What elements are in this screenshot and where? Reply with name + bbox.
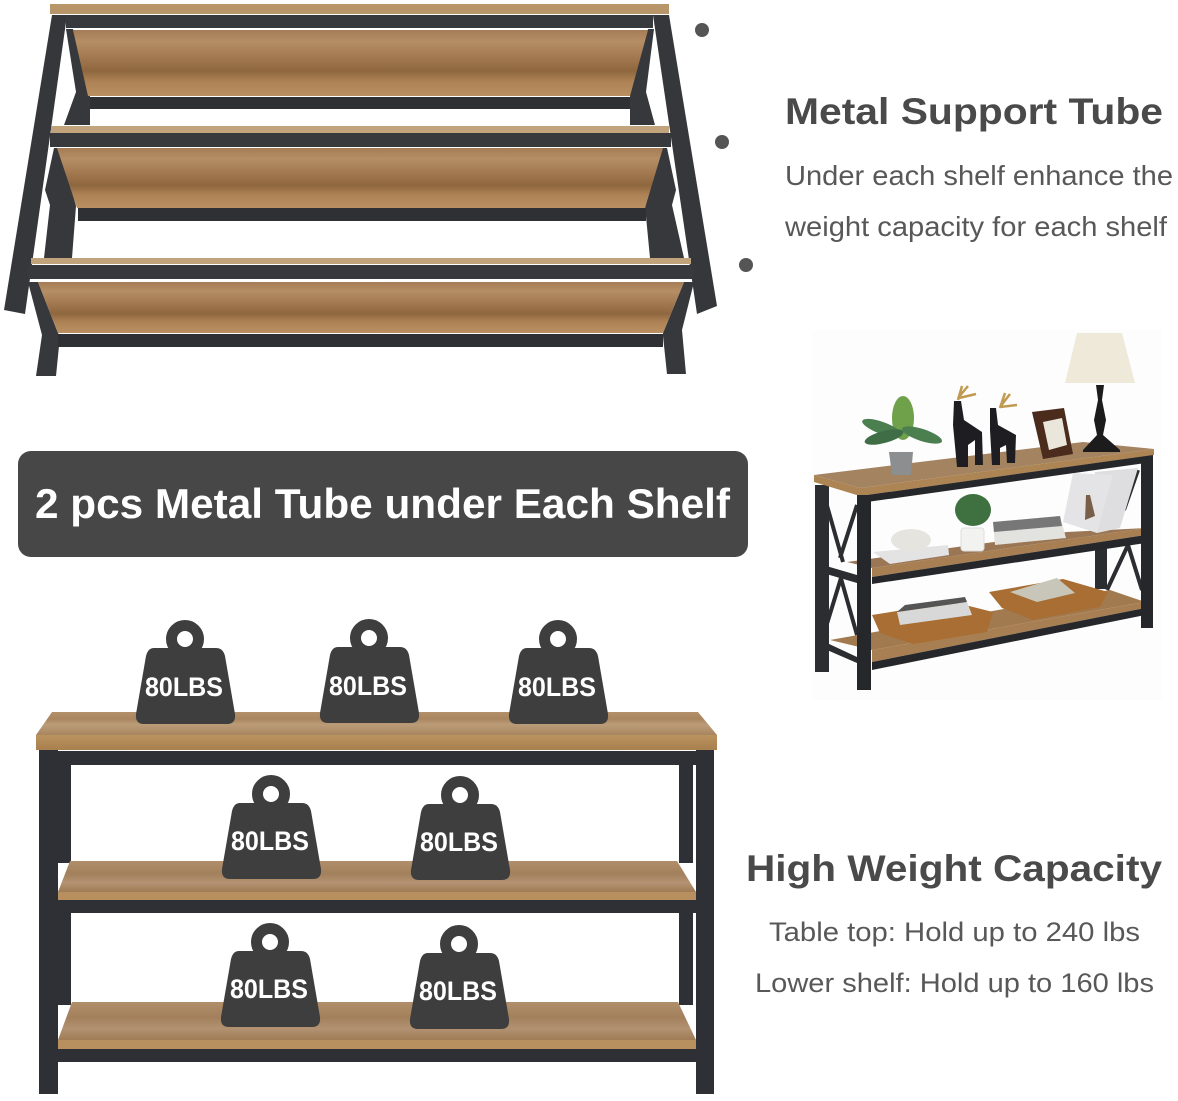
weight: top centre: 80LBS xyxy=(329,671,407,701)
picture frame xyxy=(1032,408,1073,459)
text: metal tube description xyxy=(784,160,1173,242)
middle shelf xyxy=(847,528,1146,584)
weight: middle left: 80LBS xyxy=(231,826,309,856)
legs xyxy=(39,750,714,1094)
bottom board xyxy=(58,1002,696,1062)
weight: bottom left xyxy=(221,928,320,1027)
weight: top right xyxy=(509,626,608,724)
weight: bottom right: 80LBS xyxy=(419,976,497,1006)
text: metal tube description: weight capacity for each shelf xyxy=(784,211,1167,242)
books on middle shelf xyxy=(1063,468,1138,533)
bottom shelf xyxy=(830,590,1145,670)
weight: bottom left: 80LBS xyxy=(230,974,308,1004)
middle board xyxy=(58,861,696,913)
front view table xyxy=(36,712,717,1094)
text: capacity details: Lower shelf: Hold up to 160 lbs xyxy=(755,968,1154,998)
small plant and pot xyxy=(955,494,991,551)
heading: metal support tube: Metal Support Tube xyxy=(785,90,1163,132)
stacked books xyxy=(993,516,1066,545)
top board xyxy=(36,712,717,765)
text: metal tube description: Under each shelf enhance the xyxy=(785,160,1173,191)
top shelf xyxy=(50,4,669,109)
text: capacity details xyxy=(755,917,1154,998)
weight: top centre xyxy=(320,624,419,723)
rear frame struts xyxy=(28,29,694,376)
shelf underside photo xyxy=(4,4,717,376)
weight: top left xyxy=(136,626,235,724)
weight: middle right xyxy=(411,782,510,880)
left outer leg xyxy=(4,15,67,314)
inner posts xyxy=(58,765,693,1005)
lamp xyxy=(1065,333,1135,452)
basket left with books xyxy=(872,597,993,644)
text: capacity details: Table top: Hold up to 240 lbs xyxy=(769,917,1140,947)
weight: middle left xyxy=(222,780,321,879)
banner xyxy=(18,451,748,557)
weight: middle right: 80LBS xyxy=(420,827,498,857)
banner: 2 pcs Metal Tube under Each Shelf xyxy=(35,480,731,527)
basket right with books xyxy=(989,578,1108,620)
console table photo xyxy=(812,330,1162,700)
plant xyxy=(860,396,944,475)
right outer leg xyxy=(653,15,717,314)
middle shelf xyxy=(50,126,671,221)
deer figurines xyxy=(953,401,1016,467)
deer antlers xyxy=(958,386,1017,408)
bottom shelf xyxy=(28,258,694,347)
rear legs and side braces xyxy=(815,485,1107,672)
decor bowl and book xyxy=(873,529,949,564)
weight: bottom right xyxy=(410,930,509,1029)
weight: top left: 80LBS xyxy=(145,672,223,702)
top board xyxy=(814,442,1154,503)
heading: high weight capacity: High Weight Capacity xyxy=(746,847,1162,889)
weight: top right: 80LBS xyxy=(518,672,596,702)
front legs xyxy=(857,458,1153,690)
callout dots xyxy=(695,23,753,272)
